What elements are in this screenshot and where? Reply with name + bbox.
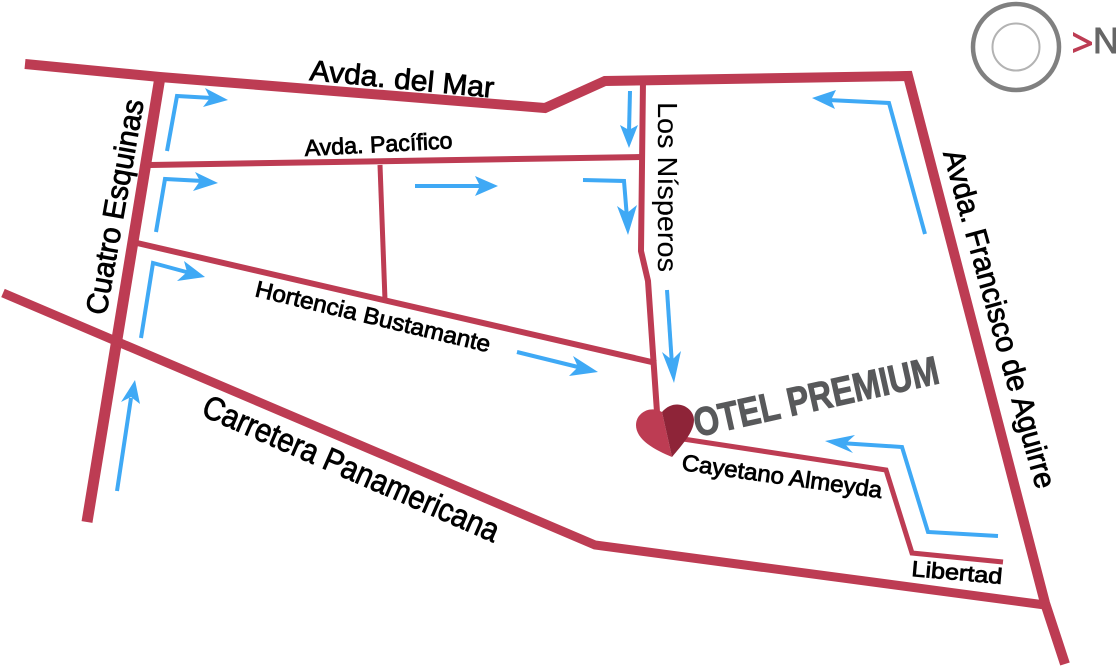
arrow 6 [583,180,637,235]
label: Hortencia Bustamante: Hortencia Bustamante [253,276,493,357]
label: Libertad: Libertad [911,556,1003,589]
label: Carretera Panamericana: Carretera Panamericana [197,387,506,549]
road: Cuatro Esquinas [87,77,160,522]
icon: compass [973,4,1059,90]
label: Avda. Francisco de Aguirre: Avda. Francisco de Aguirre [936,146,1062,492]
direction arrows [117,88,998,536]
label: Cuatro Esquinas: Cuatro Esquinas [80,97,151,317]
label: Avda. del Mar: Avda. del Mar [308,55,496,105]
arrow 11 [825,435,998,536]
road: Avda. Pacifico [150,157,642,165]
road: connector [380,165,385,300]
road: Cayetano Almeyda and Libertad [670,437,1003,562]
arrow 5 [415,176,498,196]
label: Cayetano Almeyda: Cayetano Almeyda [680,449,884,503]
arrow 9 [517,352,598,376]
label: Avda. Pacifico: Avda. Pacífico [304,127,453,161]
compass north label [1073,20,1116,61]
arrow 10 [812,90,925,234]
icon: hotel heart marker [636,404,694,457]
arrow 3 [141,261,205,338]
arrow 2 [156,172,218,232]
arrow 1 [167,88,228,151]
label: Los Nisperos: Los Nísperos [652,102,683,272]
road: Los Nisperos [641,80,657,412]
arrow 8 [662,290,681,383]
arrow 7 [620,91,638,148]
road: Carretera Panamericana [3,293,1045,605]
arrow 4 [117,380,140,491]
title: hotel name: OTEL PREMIUM [689,349,943,446]
road: Hortencia Bustamante [137,243,656,363]
